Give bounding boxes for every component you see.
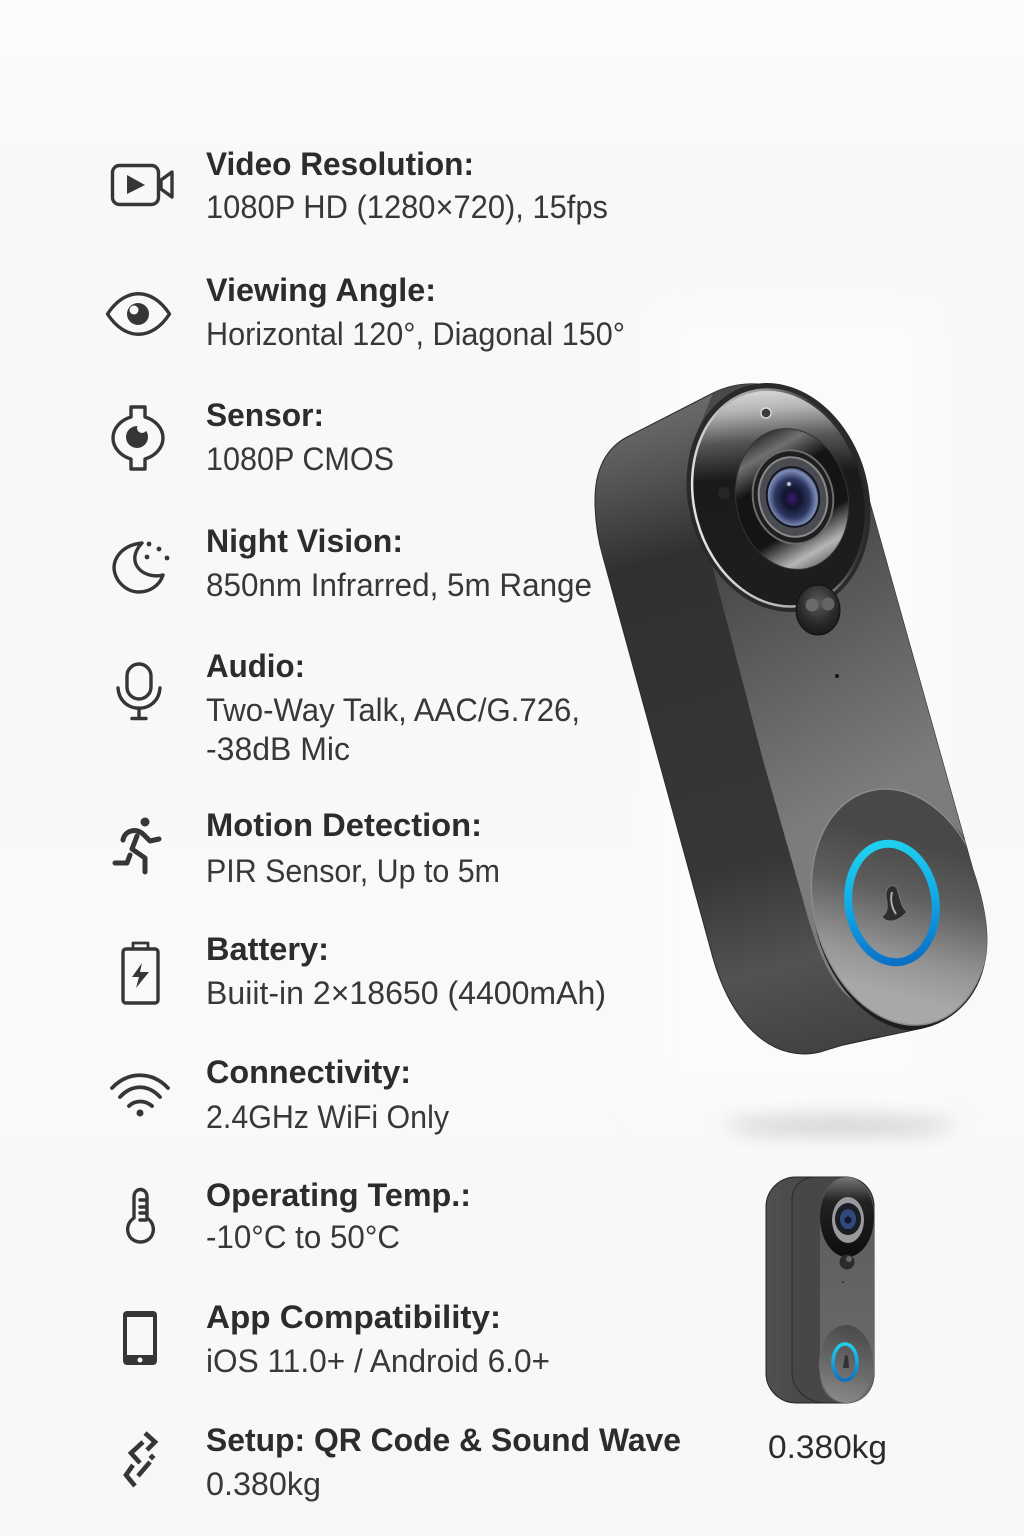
small button disc: [819, 1325, 873, 1403]
small camera: [820, 1177, 874, 1257]
spec row: sensor: Sensor:: [206, 397, 324, 433]
icon: sensor: [113, 407, 163, 469]
lens glass: [761, 462, 825, 532]
spec row: connectivity: 2.4GHz WiFi Only: [206, 1099, 449, 1135]
spec row: audio: -38dB Mic: [206, 731, 350, 767]
icon: microphone: [118, 664, 160, 718]
doorbell body side: [595, 384, 987, 1054]
spec row: setup: 0.380kg: [206, 1466, 321, 1502]
spec row: night vision: 850nm Infrarred, 5m Range: [206, 567, 592, 603]
camera housing: [662, 362, 895, 633]
indicator light: [761, 408, 771, 418]
icon: video camera: [112, 166, 172, 204]
spec row: battery: [123, 931, 606, 1011]
bell icon: [882, 885, 907, 921]
small front-view doorbell with weight: [766, 1177, 874, 1403]
doorbell button disc: [810, 788, 987, 1030]
icon: setup zigzag: [126, 1433, 156, 1486]
icon: wifi: [112, 1075, 168, 1116]
icon: battery with bolt: [123, 943, 158, 1003]
spec row: motion detection: [115, 807, 500, 889]
spec row: viewing angle: [108, 272, 625, 352]
weight label: 0.380kg: [768, 1429, 887, 1465]
microphone hole: [835, 674, 839, 678]
spec row: setup: Setup: QR Code & Sound Wave: [206, 1422, 681, 1458]
infographic canvas: [106, 152, 988, 1502]
icon: running person: [115, 818, 159, 872]
spec row: viewing angle: Horizontal 120°, Diagonal 150°: [206, 316, 625, 352]
blue LED ring: [841, 838, 943, 968]
spec row: operating temperature: Operating Temp.:: [206, 1177, 471, 1213]
spec row: viewing angle: Viewing Angle:: [206, 272, 436, 308]
lens collar: [722, 418, 862, 580]
spec row: battery: Battery:: [206, 931, 329, 967]
spec row: night vision: [114, 523, 592, 603]
spec row: app compatibility: App Compatibility:: [206, 1299, 501, 1335]
spec row: video resolution: 1080P HD (1280×720), 15fps: [206, 189, 608, 225]
spec row: battery: Buiit-in 2×18650 (4400mAh): [206, 975, 606, 1011]
spec row: operating temperature: -10°C to 50°C: [206, 1219, 400, 1255]
small doorbell middle shell: [792, 1177, 874, 1403]
icon: moon with stars: [114, 542, 169, 592]
spec row: audio: [118, 648, 580, 767]
spec row: audio: Audio:: [206, 648, 305, 684]
spec row: operating temperature: [128, 1177, 471, 1255]
spec row: connectivity: Connectivity:: [206, 1054, 411, 1090]
spec row: setup: [126, 1422, 681, 1502]
PIR sensor: [796, 585, 840, 635]
charging port slit: [843, 1037, 878, 1045]
main doorbell product image: [595, 362, 1019, 1054]
icon: thermometer: [128, 1190, 153, 1242]
spec row: video resolution: [112, 146, 608, 225]
spec row: connectivity: [112, 1054, 449, 1135]
lens barrel: [744, 443, 842, 551]
icon: smartphone: [123, 1311, 157, 1365]
spec row: sensor: [113, 397, 394, 477]
floor shadow under doorbell: [725, 1119, 955, 1133]
small doorbell face: [820, 1177, 874, 1403]
spec row: app compatibility: iOS 11.0+ / Android 6.0+: [206, 1343, 550, 1379]
small PIR: [840, 1254, 854, 1270]
small doorbell back shell: [766, 1177, 874, 1403]
doorbell front face: [690, 384, 987, 1028]
spec row: motion detection: PIR Sensor, Up to 5m: [206, 853, 500, 889]
spec row: motion detection: Motion Detection:: [206, 807, 482, 843]
spec row: video resolution: Video Resolution:: [206, 146, 474, 182]
spec row: sensor: 1080P CMOS: [206, 441, 394, 477]
spec row: app compatibility: [123, 1299, 550, 1379]
spec row: night vision: Night Vision:: [206, 523, 403, 559]
spec row: audio: Two-Way Talk, AAC/G.726,: [206, 692, 580, 728]
icon: eye: [108, 294, 170, 334]
